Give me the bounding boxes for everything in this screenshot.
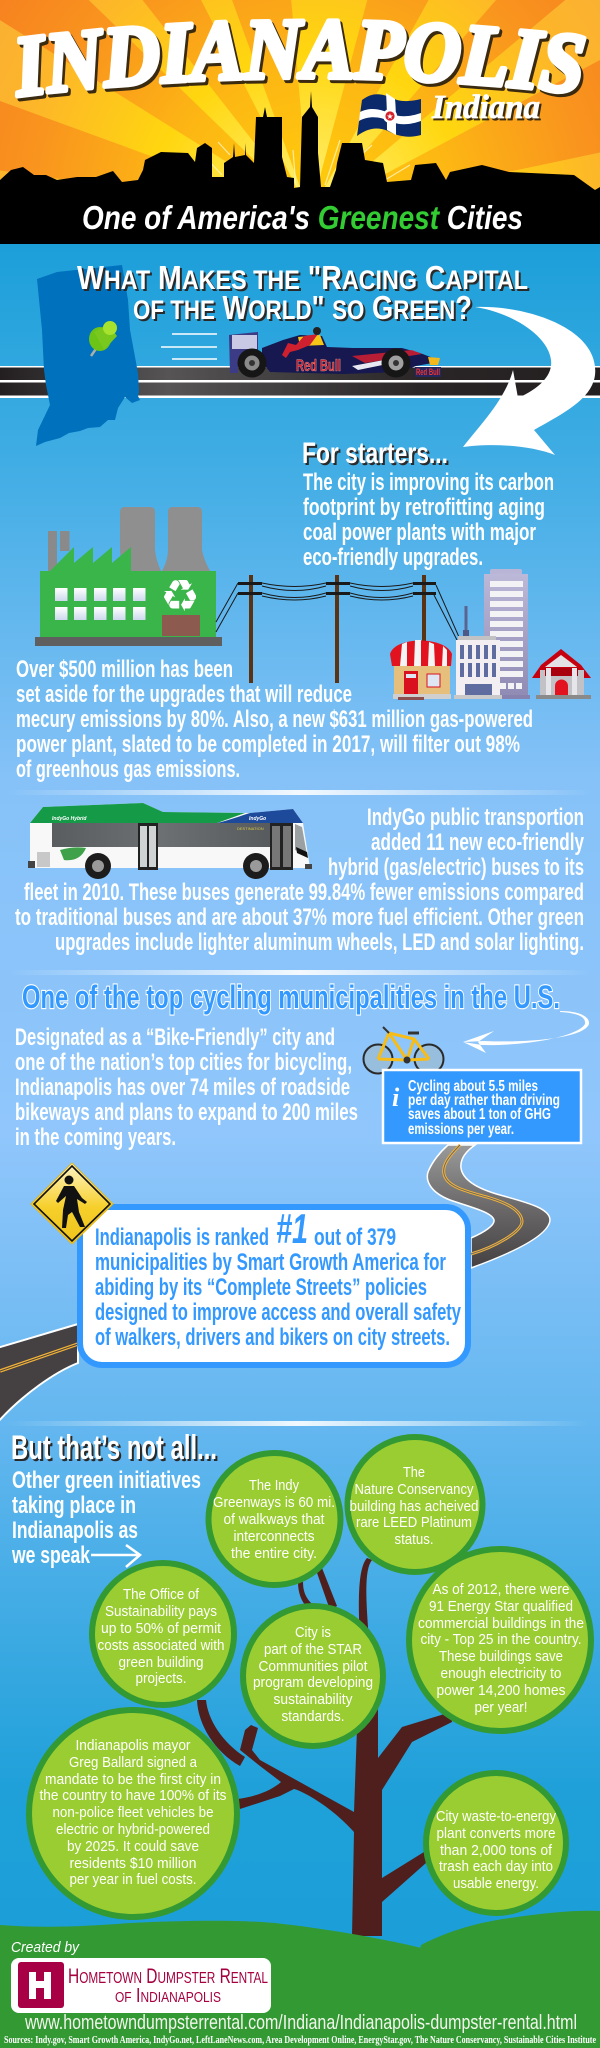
- icon: red striped shop: [390, 640, 452, 700]
- bubble: Energy Star: power 14,200 homes: [436, 1682, 566, 1699]
- bubble: Nature Conservancy: The: [403, 1464, 425, 1481]
- icon: red-roof house: [532, 649, 591, 699]
- heading: but that's not all: But that’s not all...: [11, 1429, 217, 1467]
- callout: ranked number one: abiding by its “Complete Streets” policies: [95, 1274, 427, 1301]
- bubble: Indy Greenways: [208, 1453, 340, 1585]
- bubble: waste to energy: usable energy.: [453, 1875, 539, 1892]
- bubble: waste to energy: plant converts more: [436, 1825, 556, 1842]
- bubble: Energy Star: commercial buildings in the: [418, 1615, 584, 1632]
- icon: pedestrian crossing sign: [31, 1163, 113, 1244]
- icon: Indianapolis flag: [357, 93, 421, 137]
- text: other green initiatives: [11, 1467, 201, 1569]
- callout: cycling fact: [383, 1070, 581, 1143]
- section heading: racing capital: WHAT MAKES THE "RACING CAPITAL: [77, 259, 528, 296]
- text: bike friendly: Indianapolis has over 74 miles of roadside: [15, 1074, 350, 1101]
- bubble: Nature Conservancy: rare LEED Platinum: [356, 1514, 472, 1531]
- city skyline: [0, 91, 600, 244]
- bubble: mayor mandate: per year in fuel costs.: [70, 1871, 196, 1888]
- green hills: [0, 1911, 600, 2048]
- callout: cycling fact: i: [392, 1083, 400, 1112]
- icon: IndyGo hybrid bus: IndyGo: [249, 816, 266, 822]
- race track: [0, 366, 600, 398]
- callout: cycling fact: per day rather than driving: [408, 1092, 560, 1109]
- section heading: racing capital: OF THE WORLD" SO GREEN?: [133, 289, 472, 326]
- bubble: mayor mandate: residents $10 million: [70, 1855, 196, 1872]
- icon: Red Bull race car: Red Bull: [416, 367, 440, 377]
- bubble: mayor mandate: [29, 1710, 237, 1917]
- logo: Hometown Dumpster Rental: HOMETOWN DUMPSTER RENTAL: [68, 1965, 268, 1988]
- icon: yellow bicycle: [364, 1027, 444, 1074]
- callout: ranked number one: of walkers, drivers and bikers on city streets.: [95, 1324, 450, 1351]
- icon: tall office tower: [484, 569, 530, 699]
- icon: mid-rise building: [454, 606, 502, 699]
- bubble: STAR Communities: City is: [295, 1624, 331, 1641]
- bubble: STAR Communities: [243, 1606, 383, 1746]
- bubble: Office of Sustainability: projects.: [136, 1670, 186, 1687]
- bubble: Office of Sustainability: up to 50% of permit: [101, 1620, 222, 1637]
- arrow: big white curved arrow: [463, 307, 595, 455]
- bubble: waste to energy: trash each day into: [439, 1858, 553, 1875]
- bubble: waste to energy: than 2,000 tons of: [440, 1842, 553, 1859]
- bubble: mayor mandate: by 2025. It could save: [67, 1838, 199, 1855]
- text: bike friendly: bikeways and plans to expand to 200 miles: [15, 1099, 358, 1126]
- icon: IndyGo hybrid bus: DESTINATION: [237, 826, 264, 831]
- bubble: Energy Star: These buildings save: [439, 1648, 563, 1665]
- icon: Red Bull race car: Red Bull: [296, 356, 341, 375]
- text: bike friendly: Designated as a “Bike-Friendly” city and: [15, 1024, 335, 1051]
- header banner: [0, 0, 600, 244]
- logo: Hometown Dumpster Rental: OF INDIANAPOLIS: [115, 1985, 221, 2007]
- text: other green initiatives: Other green initiatives: [12, 1467, 201, 1494]
- section heading: racing capital: [77, 259, 528, 326]
- bubble: Office of Sustainability: [92, 1563, 234, 1705]
- arrow: thin curved arrow to bike: [463, 1011, 589, 1053]
- power lines: [216, 575, 459, 683]
- bubble: Office of Sustainability: Sustainability pays: [105, 1603, 217, 1620]
- credit: created by: Created by: [11, 1939, 80, 1956]
- bubble: mayor mandate: the country to have 100% of its: [40, 1787, 226, 1804]
- bubble: Indy Greenways: Greenways is 60 mi.: [213, 1494, 335, 1511]
- bubble: Nature Conservancy: [348, 1437, 482, 1572]
- bubble: Energy Star: 91 Energy Star qualified: [429, 1598, 573, 1615]
- callout: ranked number one: Indianapolis is ranked: [95, 1224, 269, 1251]
- text: carbon footprint: [303, 469, 554, 571]
- text: other green initiatives: Indianapolis as: [12, 1517, 138, 1544]
- text: other green initiatives: we speak: [11, 1542, 90, 1569]
- bubble: Energy Star: [409, 1549, 591, 1731]
- logo: Hometown Dumpster Rental: [11, 1958, 271, 2013]
- bubble: Energy Star: per year!: [474, 1699, 528, 1716]
- title: Indianapolis: INDIANAPOLIS: [14, 18, 587, 98]
- bubble: Nature Conservancy: status.: [394, 1531, 434, 1548]
- text: bike friendly: in the coming years.: [15, 1124, 176, 1151]
- bubble: Indy Greenways: of walkways that: [224, 1511, 325, 1528]
- bubble: Nature Conservancy: building has acheived: [350, 1498, 478, 1515]
- text: power plant upgrades: [16, 656, 533, 783]
- winding road, lower: [0, 1324, 78, 1423]
- bubble: mayor mandate: Greg Ballard signed a: [69, 1754, 198, 1771]
- heading: for starters: For starters...: [302, 437, 448, 470]
- text: carbon footprint: eco-friendly upgrades.: [303, 544, 483, 571]
- icon: Indiana state map: [36, 265, 140, 446]
- icon: IndyGo hybrid bus: [28, 803, 312, 879]
- text: other green initiatives: taking place in: [12, 1492, 136, 1519]
- text: IndyGo transport: [15, 804, 584, 956]
- winding road, upper: [427, 1145, 550, 1268]
- text: bike friendly: one of the nation’s top cities for bicycling,: [15, 1049, 352, 1076]
- callout: cycling fact: Cycling about 5.5 miles: [408, 1078, 538, 1095]
- text: bike friendly: [15, 1024, 358, 1151]
- icon: green power plant: ♻: [160, 571, 200, 622]
- bubble: Energy Star: enough electricity to: [440, 1665, 562, 1682]
- state label: Indiana: Indiana: [431, 89, 540, 126]
- bubble: mayor mandate: non-police fleet vehicles be: [52, 1804, 214, 1821]
- bubble: mayor mandate: Indianapolis mayor: [76, 1737, 191, 1754]
- tree trunk and branches: [197, 1558, 452, 1936]
- bubble: mayor mandate: mandate to be the first city in: [45, 1771, 221, 1788]
- bubble: Nature Conservancy: Nature Conservancy: [354, 1481, 474, 1498]
- icon: IndyGo hybrid bus: IndyGo Hybrid: [52, 816, 87, 822]
- icon: map pin: [89, 321, 117, 356]
- icon: Indianapolis flag: ★: [386, 112, 394, 121]
- callout: ranked number one: out of 379: [314, 1224, 396, 1251]
- bubble: Energy Star: city - Top 25 in the country.: [420, 1631, 582, 1648]
- bubble: mayor mandate: electric or hybrid-powered: [56, 1821, 210, 1838]
- bubble: STAR Communities: Communities pilot: [258, 1658, 368, 1675]
- bubble: STAR Communities: program developing: [253, 1674, 373, 1691]
- icon: green power plant: [35, 507, 222, 646]
- callout: cycling fact: saves about 1 ton of GHG: [408, 1106, 551, 1123]
- callout: ranked number one: #1: [276, 1205, 308, 1252]
- bubble: waste to energy: [426, 1773, 566, 1913]
- callout: ranked number one: municipalities by Smart Growth America for: [95, 1249, 446, 1276]
- bubble: Office of Sustainability: costs associated with: [98, 1637, 224, 1654]
- bubble: Indy Greenways: the entire city.: [231, 1545, 317, 1562]
- bubble: STAR Communities: standards.: [282, 1708, 344, 1725]
- title: Indianapolis: INDIANAPOLIS: [17, 21, 590, 102]
- bubble: STAR Communities: part of the STAR: [264, 1641, 362, 1658]
- text: power plant upgrades: of greenhous gas emissions.: [16, 756, 240, 783]
- bubble: Energy Star: As of 2012, there were: [432, 1581, 570, 1598]
- tagline: One of America's Greenest Cities: [82, 199, 523, 236]
- bubble: Office of Sustainability: green building: [118, 1654, 204, 1671]
- arrow: we speak: [91, 1545, 140, 1567]
- icon: Red Bull race car: [229, 327, 441, 378]
- bubble: Indy Greenways: interconnects: [234, 1528, 314, 1545]
- text: power plant upgrades: set aside for the upgrades that will reduce: [16, 681, 352, 708]
- text: power plant upgrades: Over $500 million has been: [16, 656, 233, 683]
- bubble: waste to energy: City waste-to-energy: [436, 1808, 556, 1825]
- bubble: Office of Sustainability: The Office of: [123, 1586, 200, 1603]
- callout: ranked number one: [80, 1205, 468, 1365]
- callout: cycling fact: emissions per year.: [408, 1121, 514, 1138]
- speed lines: [161, 334, 217, 359]
- bubble: STAR Communities: sustainability: [274, 1691, 353, 1708]
- bubble: Indy Greenways: The Indy: [249, 1477, 299, 1494]
